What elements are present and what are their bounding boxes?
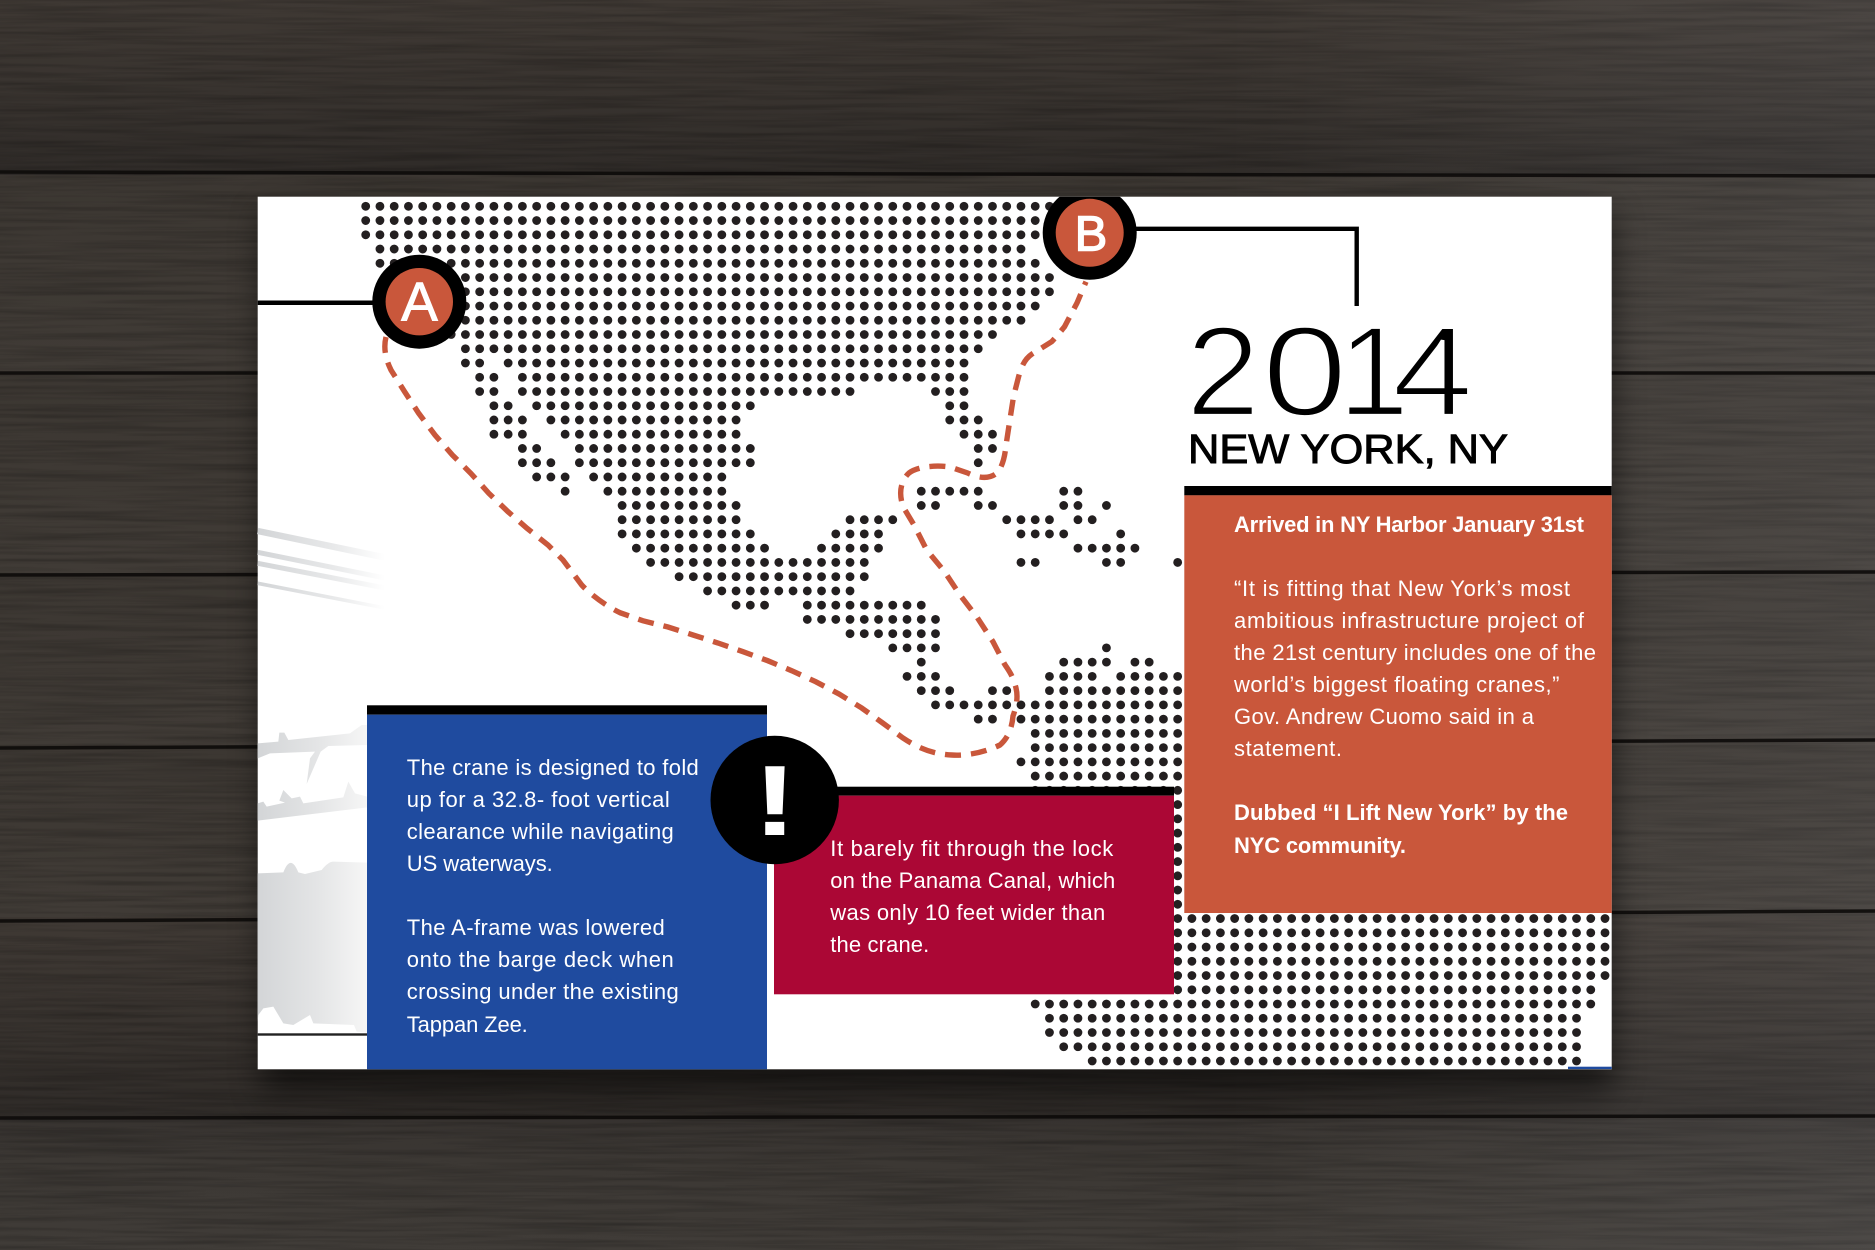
year heading: 1 [1338,300,1409,444]
dashed route from A to B [385,282,1086,755]
governor quote [1233,576,1596,761]
A-frame paragraph [407,915,679,1037]
governor quote: “It is fitting that New York’s most [1234,576,1570,601]
fold paragraph: up for a 32.8- foot vertical [407,787,670,812]
A-frame paragraph: The A-frame was lowered [407,915,665,940]
panel: orange arrival note [1184,486,1612,913]
badge B: B [1075,208,1107,262]
nickname note: Dubbed “I Lift New York” by the [1234,800,1568,825]
governor quote: Gov. Andrew Cuomo said in a [1234,704,1535,729]
icon: exclamation badge [710,736,839,864]
fold paragraph: The crane is designed to fold [407,755,699,780]
badge A [372,255,466,349]
poster card [258,197,1612,1069]
icon: exclamation badge: ! [753,745,797,857]
crane silhouette: cables [258,531,385,608]
panel: blue crane note [367,705,767,1069]
governor quote: the 21st century includes one of the [1234,640,1596,665]
fold paragraph: US waterways. [407,851,553,876]
connector line from badge B to year [1125,229,1357,306]
year heading: 2 [1186,300,1260,443]
badge A: A [401,270,438,332]
year heading: 4 [1392,301,1473,443]
crane silhouette: grey structure [258,725,367,1033]
lock paragraph: on the Panama Canal, which [830,868,1115,893]
card drop shadow [262,212,1612,1092]
dotted world map [366,206,1605,1061]
arrival date: Arrived in NY Harbor January 31st [1234,512,1585,537]
lock paragraph: the crane. [830,932,929,957]
A-frame paragraph: Tappan Zee. [407,1012,528,1037]
connector line to badge A [258,300,388,305]
year heading: 0 [1262,300,1347,443]
lock paragraph: was only 10 feet wider than [829,900,1105,925]
lock paragraph [829,836,1115,957]
location heading: NEW YORK, NY [1188,426,1508,472]
A-frame paragraph: onto the barge deck when [407,947,674,972]
fold paragraph: clearance while navigating [407,819,674,844]
year heading [1186,300,1473,444]
governor quote: ambitious infrastructure project of [1234,608,1585,633]
governor quote: statement. [1234,736,1342,761]
governor quote: world’s biggest floating cranes,” [1233,672,1560,697]
nickname note [1234,800,1568,858]
lock paragraph: It barely fit through the lock [830,836,1114,861]
nickname note: NYC community. [1234,833,1406,858]
A-frame paragraph: crossing under the existing [407,979,679,1004]
fold paragraph [407,755,699,876]
small blue edge line [1568,1067,1612,1069]
panel: crimson lock note [774,787,1174,994]
badge B [1042,196,1137,280]
thin line lower left [258,1033,368,1036]
